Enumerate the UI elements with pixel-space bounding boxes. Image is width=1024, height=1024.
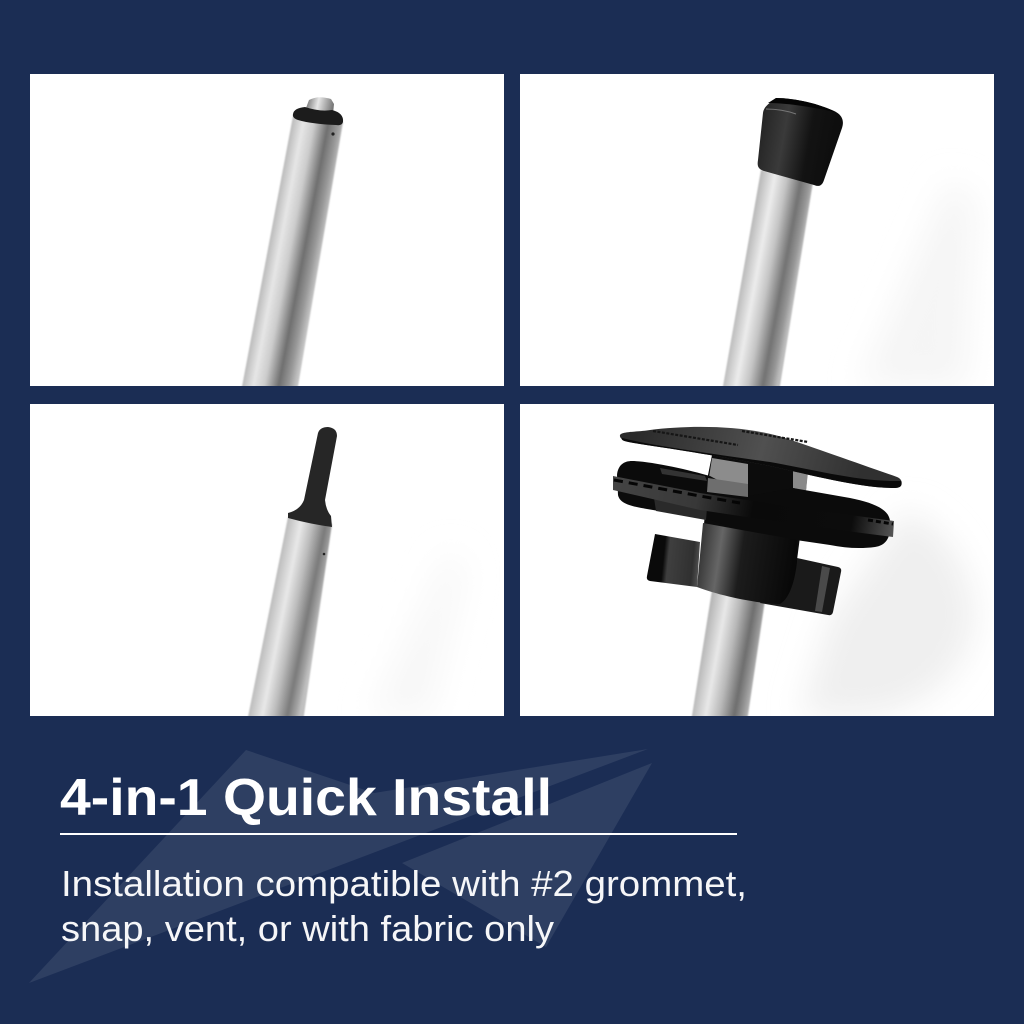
pole body [247, 517, 332, 722]
panel: pole with rubber tip [520, 74, 994, 392]
description: Installation compatible with #2 grommet, [61, 863, 747, 904]
knob hub [697, 523, 797, 604]
black collar [293, 107, 343, 125]
rubber tip [758, 98, 843, 186]
soft shadow [370, 550, 465, 716]
knob right wing [760, 558, 841, 615]
soft shadow [810, 521, 972, 716]
description: snap, vent, or with fabric only [61, 908, 554, 949]
metal stud [306, 97, 334, 111]
disc lower edge [622, 438, 902, 488]
pole body [241, 116, 343, 392]
black narrow tip [288, 427, 337, 527]
pole body [722, 170, 813, 392]
side hole [331, 132, 335, 136]
knob left wing [647, 534, 700, 587]
soft shadow [890, 226, 958, 372]
side hole [323, 553, 325, 555]
panel: pole with narrow tip [30, 404, 504, 722]
top disc [620, 427, 902, 488]
panel: pole with disc assembly [520, 404, 994, 722]
barrel highlights [654, 498, 707, 520]
panel: pole with metal stud [30, 74, 504, 392]
barrel [617, 461, 890, 548]
top column [703, 455, 808, 560]
toothed ring [613, 476, 894, 537]
title rule [60, 833, 737, 835]
watermark logo [29, 749, 652, 983]
disc lettering [653, 431, 808, 445]
pole body [691, 590, 765, 722]
title: 4-in-1 Quick Install [60, 769, 552, 827]
